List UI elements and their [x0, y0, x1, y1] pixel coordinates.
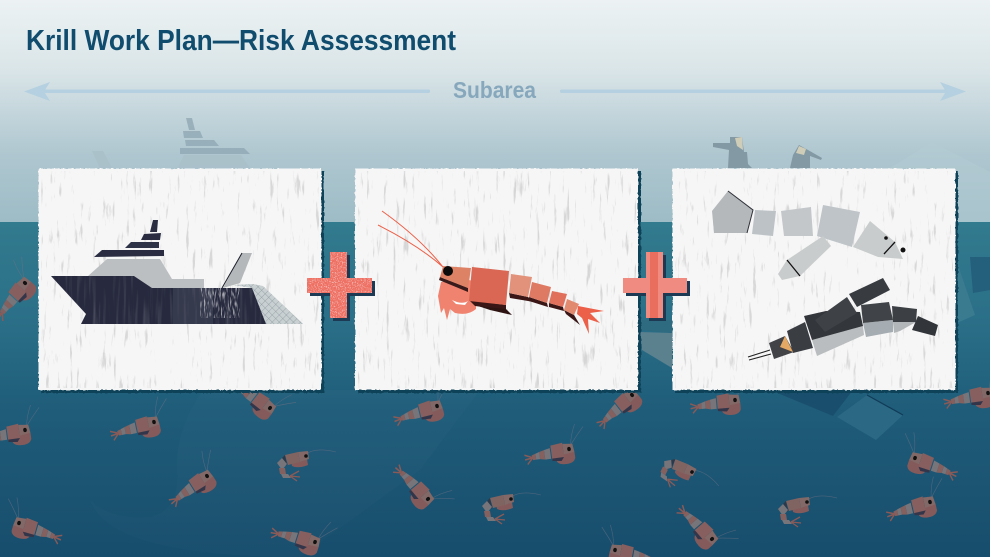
icon: polar bear	[712, 191, 906, 280]
paper texture	[675, 171, 953, 388]
background: sky	[0, 0, 990, 223]
title: Krill Work Plan—Risk Assessment	[26, 25, 456, 57]
icon: fishing vessel	[51, 220, 303, 324]
panel: predators	[672, 168, 958, 393]
paper texture	[358, 171, 636, 388]
krill swarm	[0, 254, 990, 557]
plus sign 2	[623, 252, 690, 321]
panel: vessel	[38, 168, 324, 393]
background: sea	[0, 222, 990, 557]
label: subarea: Subarea	[453, 77, 536, 103]
icon: krill	[378, 211, 604, 334]
ghost ship above waterline	[92, 118, 250, 168]
ghost turrets and iceberg on the horizon	[713, 137, 990, 222]
arrow: subarea left	[24, 82, 430, 101]
icon: leopard seal	[748, 278, 938, 360]
sea current shading	[90, 390, 480, 557]
panel: krill	[355, 168, 641, 393]
plus sign 1	[307, 252, 375, 321]
ghost shapes underwater	[640, 257, 990, 440]
paper texture	[41, 171, 319, 388]
arrow: subarea right	[560, 82, 966, 101]
